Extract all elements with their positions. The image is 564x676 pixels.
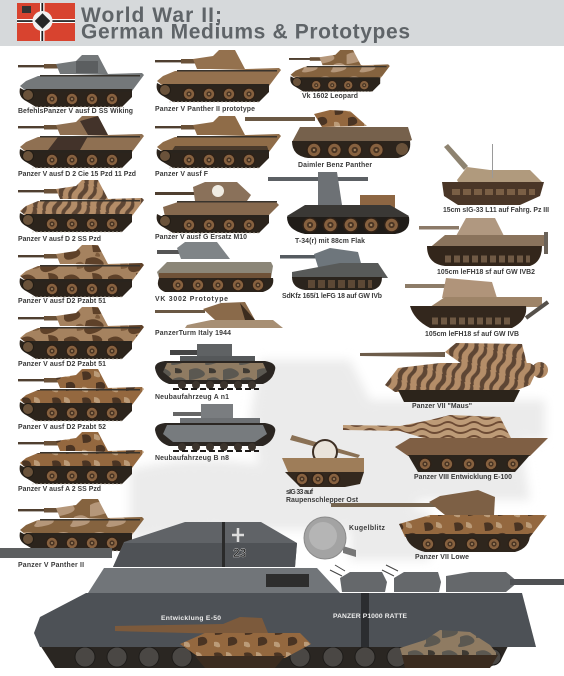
label: Panzer V Panther II prototype: [155, 106, 255, 113]
tank: Panzer P1000 Ratte: [0, 522, 564, 668]
label: [286, 489, 359, 504]
label: Vk 1602 Leopard: [302, 93, 358, 100]
tank: Ersatz M10: [155, 182, 279, 233]
label: Panzer VII "Maus": [412, 403, 472, 410]
E-50: [115, 617, 311, 668]
label: SdKfz 165/1 leFG 18 auf GW IVb: [282, 293, 382, 300]
hull details: [232, 528, 369, 647]
background watermark tank: [130, 360, 545, 560]
tank: D2 SS Pzd: [18, 180, 144, 232]
header bar: [0, 0, 564, 46]
tank: Panther II prototype: [155, 50, 281, 102]
label: Raupenschlepper Ost: [286, 497, 359, 504]
label: Panzer V ausf D2 Pzabt 51: [18, 361, 106, 368]
icon: Kugelblitz ball: [304, 517, 356, 559]
tank: Neubaufahrzeug A: [155, 344, 275, 389]
tracks: [38, 642, 510, 668]
small turrets: [330, 565, 564, 592]
tank: D2 Pzabt 51 a: [18, 245, 144, 297]
label: T-34(r) mit 88cm Flak: [295, 238, 365, 245]
tank: 105cm GW IVB: [405, 278, 548, 328]
tank: VK 3002: [157, 242, 273, 292]
superstructure: [88, 568, 340, 593]
tank: Lowe: [331, 490, 547, 552]
tank: D2 Pzabt 51 b: [18, 307, 144, 359]
half-track: [400, 630, 498, 668]
hull text: [161, 546, 408, 622]
label: Neubaufahrzeug B n8: [155, 455, 229, 462]
label: Panzer V ausf D 2 SS Pzd: [18, 236, 101, 243]
label: VK 3002 Prototype: [155, 296, 228, 303]
tank: PanzerTurm Italy: [155, 302, 283, 328]
label: Panzer V ausf D 2 Cie 15 Pzd 11 Pzd: [18, 171, 136, 178]
label: Panzer VIII Entwicklung E-100: [414, 474, 512, 481]
tank: 15cm sIG-33 Pz III: [442, 144, 544, 205]
label: Panzer V ausf G Ersatz M10: [155, 234, 247, 241]
title: [81, 4, 410, 44]
label: Panzer V ausf A 2 SS Pzd: [18, 486, 101, 493]
label: Panzer V ausf D2 Pzabt 51: [18, 298, 106, 305]
label: 105cm leFH18 sf auf GW IVB: [425, 331, 519, 338]
hull text: Entwicklung E-50: [161, 615, 221, 622]
hull text: PANZER P1000 RATTE: [333, 613, 408, 620]
label: Panzer VII Lowe: [415, 554, 469, 561]
label: Panzer V ausf D2 Pzabt 52: [18, 424, 106, 431]
tank: D2 Cie 15: [18, 116, 144, 168]
hull text: 23: [233, 546, 247, 560]
tank: Panther II: [18, 499, 144, 551]
label: Daimler Benz Panther: [298, 162, 372, 169]
label: sIG 33 auf: [286, 489, 314, 496]
tank: VK 1602 Leopard: [289, 50, 390, 92]
label: 105cm leFH18 sf auf GW IVB2: [437, 269, 535, 276]
title: World War II;: [81, 4, 222, 27]
label: Kugelblitz: [349, 525, 386, 532]
tank: T-34 with 88cm Flak: [268, 172, 409, 234]
tank: SdKfz 165/1: [280, 248, 388, 290]
label: Panzer V Panther II: [18, 562, 84, 569]
tank: A 2 SS Pzd: [18, 432, 144, 484]
main turret: [0, 522, 297, 567]
tank: E-100: [343, 415, 548, 472]
label: Neubaufahrzeug A n1: [155, 394, 229, 401]
tank: Neubaufahrzeug B: [155, 404, 275, 451]
tank: 105cm GW IVB2: [419, 218, 548, 266]
tank: Daimler Benz Panther: [245, 110, 412, 158]
tank: Maus: [360, 343, 548, 402]
flag icon: [17, 3, 75, 41]
title: German Mediums & Prototypes: [81, 20, 410, 44]
lower hull: [34, 593, 536, 647]
tank: Befehlspanzer: [18, 55, 144, 107]
tank: sIG 33 Raupenschlepper: [282, 435, 364, 487]
label: 15cm sIG-33 L11 auf Fahrg. Pz III: [443, 207, 549, 214]
label: PanzerTurm Italy 1944: [155, 330, 231, 337]
tank: D2 Pzabt 52: [18, 369, 144, 421]
label: Panzer V ausf F: [155, 171, 208, 178]
label: BefehlsPanzer V ausf D SS Wiking: [18, 108, 133, 115]
tank: ausf F: [155, 116, 281, 168]
